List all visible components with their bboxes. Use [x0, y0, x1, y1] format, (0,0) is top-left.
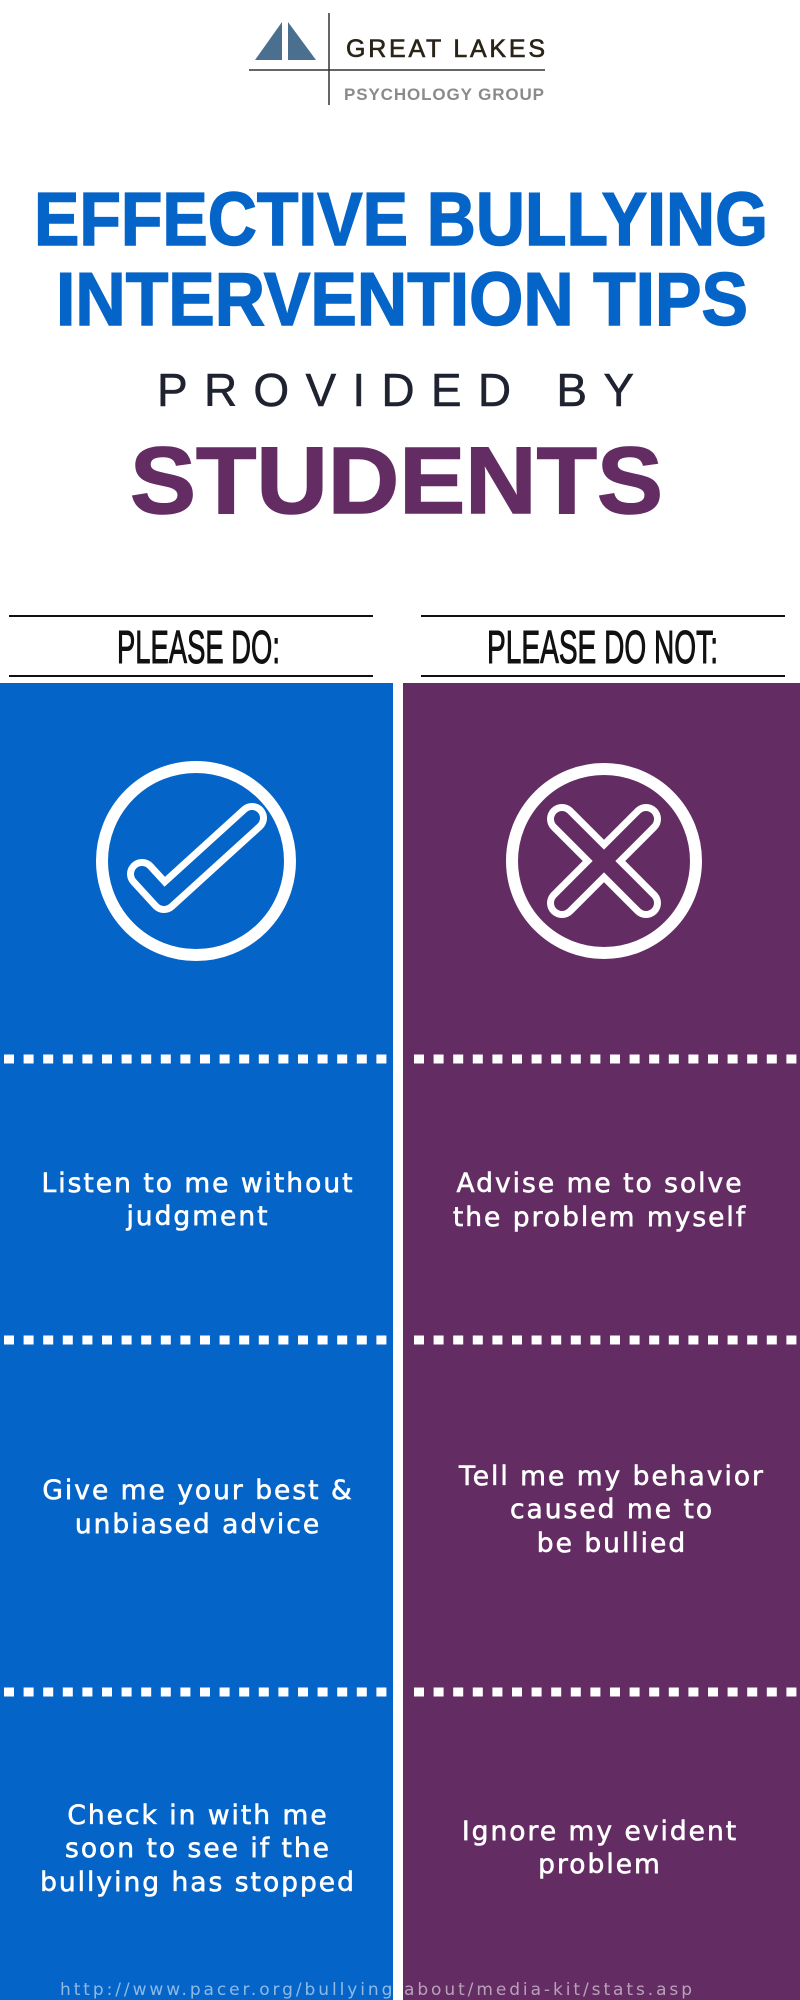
panel: do not column — [403, 683, 800, 2000]
icon: x circle — [512, 769, 696, 953]
text: do not tip 2: Tell me my behavior — [458, 1461, 765, 1492]
subtitle: provided by: PROVIDED BY — [157, 364, 634, 416]
text: do not tip 3: Ignore my evident — [462, 1816, 738, 1847]
text: do tip 1: judgment — [125, 1201, 270, 1232]
logo text: great lakes: GREAT LAKES — [346, 35, 545, 63]
subtitle: students: STUDENTS — [130, 428, 663, 534]
text: do not tip 3: problem — [538, 1849, 662, 1880]
text: do tip 2: Give me your best & — [42, 1475, 354, 1506]
heading: please do: PLEASE DO: — [117, 621, 280, 673]
text: do tip 2: unbiased advice — [75, 1509, 321, 1540]
title — [34, 177, 768, 341]
icon: check circle — [102, 767, 290, 955]
text: do not tip 1: Advise me to solve — [456, 1168, 744, 1199]
text: do not tip 1: the problem myself — [453, 1202, 747, 1233]
text: do not tip 2: caused me to — [510, 1494, 714, 1525]
text: do tip 1: Listen to me without — [41, 1168, 355, 1199]
logo — [249, 13, 545, 105]
text: do tip 3: soon to see if the — [65, 1833, 331, 1864]
panel: do column — [0, 683, 393, 2000]
logo text: psychology group: PSYCHOLOGY GROUP — [344, 85, 544, 104]
title: INTERVENTION TIPS — [56, 257, 748, 341]
footer: source url: http://www.pacer.org/bullying/about/media-kit/stats.asp — [60, 1980, 692, 2000]
text: do tip 3: bullying has stopped — [40, 1867, 356, 1898]
text: do tip 3: Check in with me — [67, 1800, 329, 1831]
text: do not tip 2: be bullied — [537, 1528, 687, 1559]
icon: logo triangles — [255, 22, 316, 60]
